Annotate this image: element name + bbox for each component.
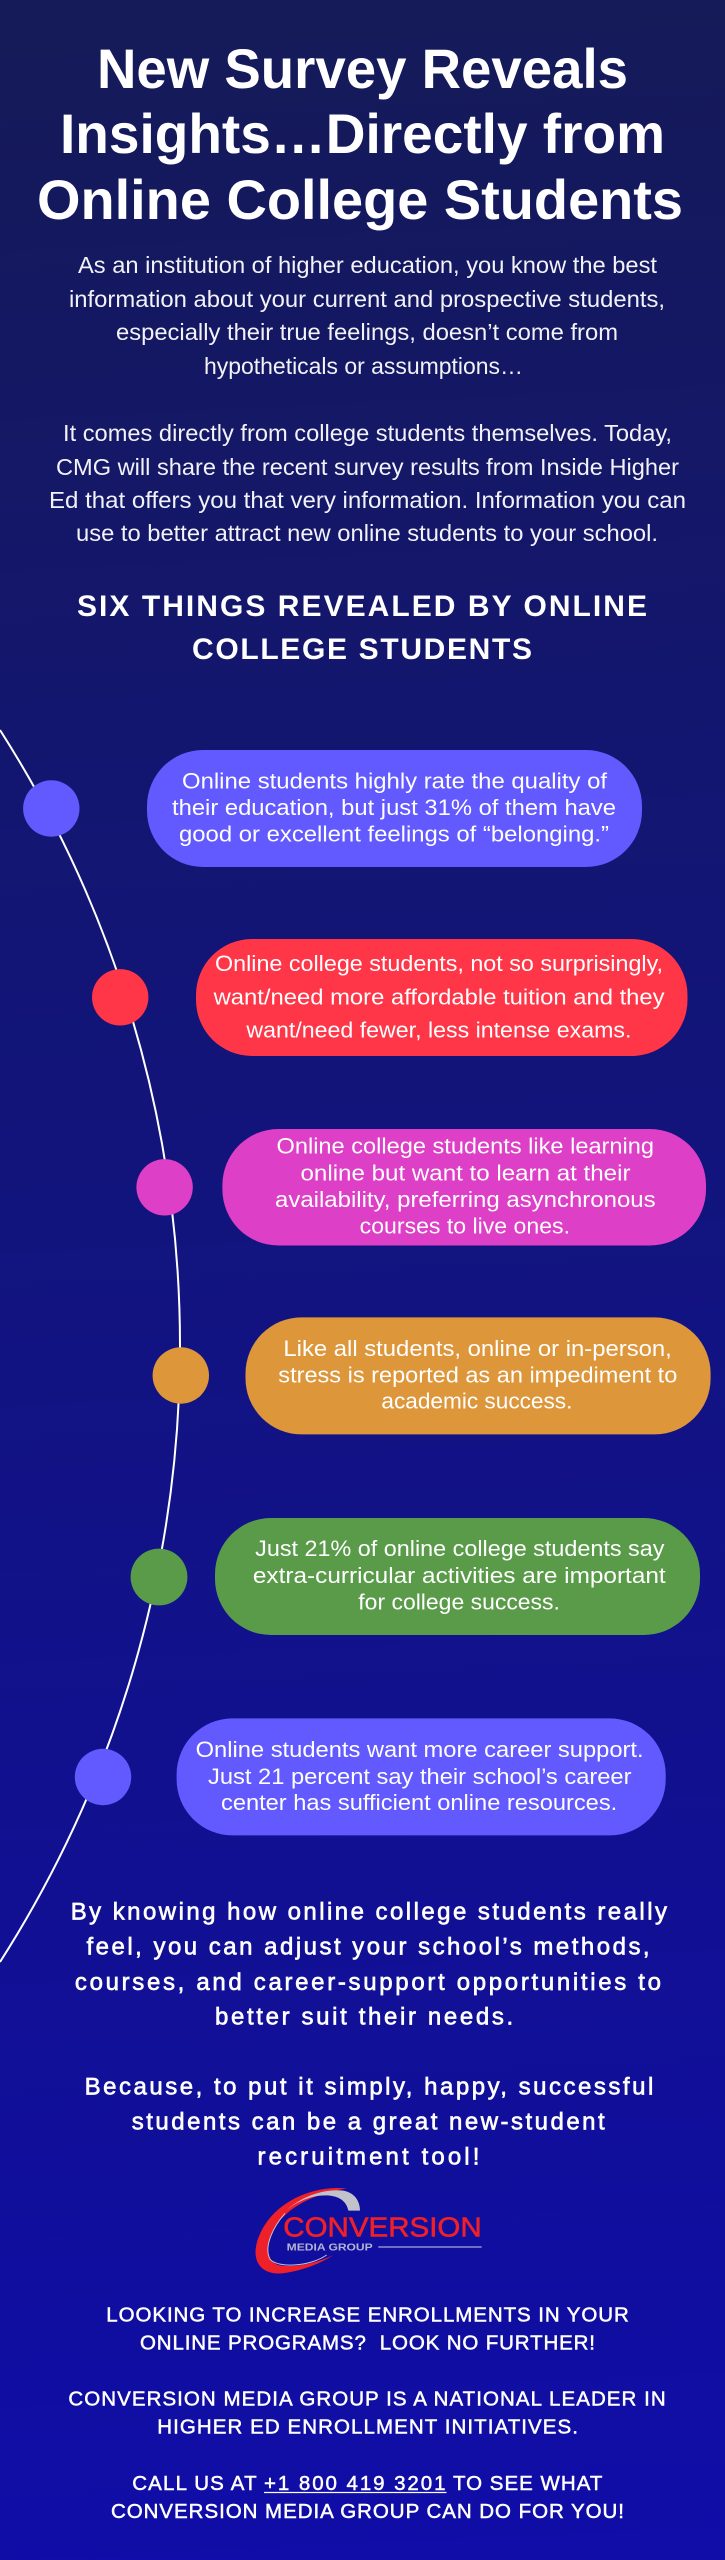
callout 1: belonging: their education, but just 31% of them have <box>172 795 616 820</box>
intro paragraph 1 <box>69 252 665 379</box>
section heading: SIX THINGS REVEALED BY ONLINE <box>77 590 647 623</box>
closing paragraph 1 <box>71 1899 667 2031</box>
callout 4: stress <box>246 1317 711 1434</box>
callout 5: extra-curricular activities <box>215 1518 700 1635</box>
callout 1: belonging <box>147 750 642 867</box>
closing paragraph 2: students can be a great new-student <box>132 2108 605 2135</box>
marker 1 <box>23 780 80 837</box>
callout 5: extra-curricular activities: for college success. <box>358 1589 560 1614</box>
logo swoosh <box>256 2188 360 2273</box>
closing paragraph 1: courses, and career-support opportunities to <box>75 1969 661 1996</box>
call to action 2: CONVERSION MEDIA GROUP IS A NATIONAL LEADER IN <box>68 2388 666 2411</box>
closing paragraph 1: feel, you can adjust your school’s methods, <box>86 1934 650 1960</box>
call to action 3: phone number <box>111 2472 624 2523</box>
title: New Survey Reveals <box>97 37 628 100</box>
marker 6 <box>75 1749 131 1805</box>
title: Insights…Directly from <box>60 102 665 165</box>
callout 5: extra-curricular activities: Just 21% of online college students say <box>255 1536 665 1561</box>
title: Online College Students <box>37 168 683 231</box>
call to action 2 <box>68 2388 666 2439</box>
title <box>37 37 683 231</box>
call to action 1: LOOKING TO INCREASE ENROLLMENTS IN YOUR <box>106 2303 629 2326</box>
closing paragraph 2: Because, to put it simply, happy, successful <box>85 2074 653 2101</box>
closing paragraph 2: recruitment tool! <box>258 2143 479 2170</box>
call to action 3: phone number: +1 800 419 3201 <box>264 2472 446 2495</box>
callout 4: stress: academic success. <box>381 1389 572 1414</box>
timeline curve <box>0 730 180 1962</box>
callout 4: stress: Like all students, online or in-person, <box>283 1336 672 1361</box>
callout 2: tuition and exams <box>196 939 688 1056</box>
intro paragraph 2: Ed that offers you that very information. Information you can <box>49 487 686 513</box>
marker 4 <box>153 1347 209 1404</box>
callout 3: asynchronous courses: availability, preferring asynchronous <box>275 1187 656 1212</box>
logo: Conversion Media Group: CONVERSION <box>283 2212 482 2243</box>
callout 2: tuition and exams: want/need fewer, less intense exams. <box>245 1018 631 1042</box>
marker 5 <box>131 1549 187 1605</box>
marker 3 <box>136 1159 193 1216</box>
closing paragraph 2 <box>85 2074 653 2170</box>
callout 2: tuition and exams: want/need more affordable tuition and they <box>213 984 665 1010</box>
callout 6: career support <box>177 1718 666 1835</box>
callout 6: career support: center has sufficient online resources. <box>221 1790 617 1815</box>
callout 3: asynchronous courses <box>222 1129 706 1246</box>
intro paragraph 1: As an institution of higher education, you know the best <box>78 252 657 278</box>
call to action 1: ONLINE PROGRAMS? LOOK NO FURTHER! <box>140 2331 595 2354</box>
section heading: COLLEGE STUDENTS <box>192 633 532 666</box>
callout 3: asynchronous courses: online but want to learn at their <box>300 1160 631 1185</box>
section heading <box>77 590 647 666</box>
intro paragraph 1: especially their true feelings, doesn’t come from <box>116 319 618 345</box>
intro paragraph 2: use to better attract new online students to your school. <box>76 520 658 546</box>
call to action 1 <box>106 2303 629 2354</box>
closing paragraph 1: better suit their needs. <box>215 2004 513 2031</box>
call to action 2: HIGHER ED ENROLLMENT INITIATIVES. <box>157 2416 578 2439</box>
callout 5: extra-curricular activities: extra-curricular activities are important <box>253 1563 667 1588</box>
call to action 3: phone number: CONVERSION MEDIA GROUP CAN DO FOR YOU! <box>111 2500 624 2523</box>
closing paragraph 1: By knowing how online college students really <box>71 1899 667 1926</box>
marker 2 <box>92 969 148 1026</box>
callout 6: career support: Online students want more career support. <box>196 1737 644 1762</box>
callout 3: asynchronous courses: Online college students like learning <box>276 1134 654 1159</box>
call to action 3: phone number: CALL US AT <box>132 2472 257 2495</box>
intro paragraph 2: CMG will share the recent survey results from Inside Higher <box>56 454 679 480</box>
callout 1: belonging: good or excellent feelings of “belonging.” <box>179 822 609 846</box>
intro paragraph 2 <box>49 420 686 546</box>
callout 3: asynchronous courses: courses to live ones. <box>360 1214 570 1238</box>
callout 6: career support: Just 21 percent say their school’s career <box>208 1764 632 1789</box>
callout 1: belonging: Online students highly rate the quality of <box>182 768 608 793</box>
intro paragraph 2: It comes directly from college students themselves. Today, <box>63 420 672 446</box>
call to action 3: phone number: TO SEE WHAT <box>453 2472 603 2495</box>
intro paragraph 1: information about your current and prospective students, <box>69 286 665 312</box>
logo: Conversion Media Group: MEDIA GROUP <box>287 2242 373 2253</box>
callout 4: stress: stress is reported as an impediment to <box>278 1363 677 1388</box>
logo: Conversion Media Group <box>256 2188 482 2273</box>
intro paragraph 1: hypotheticals or assumptions… <box>204 353 523 379</box>
callout 2: tuition and exams: Online college students, not so surprisingly, <box>215 951 663 976</box>
